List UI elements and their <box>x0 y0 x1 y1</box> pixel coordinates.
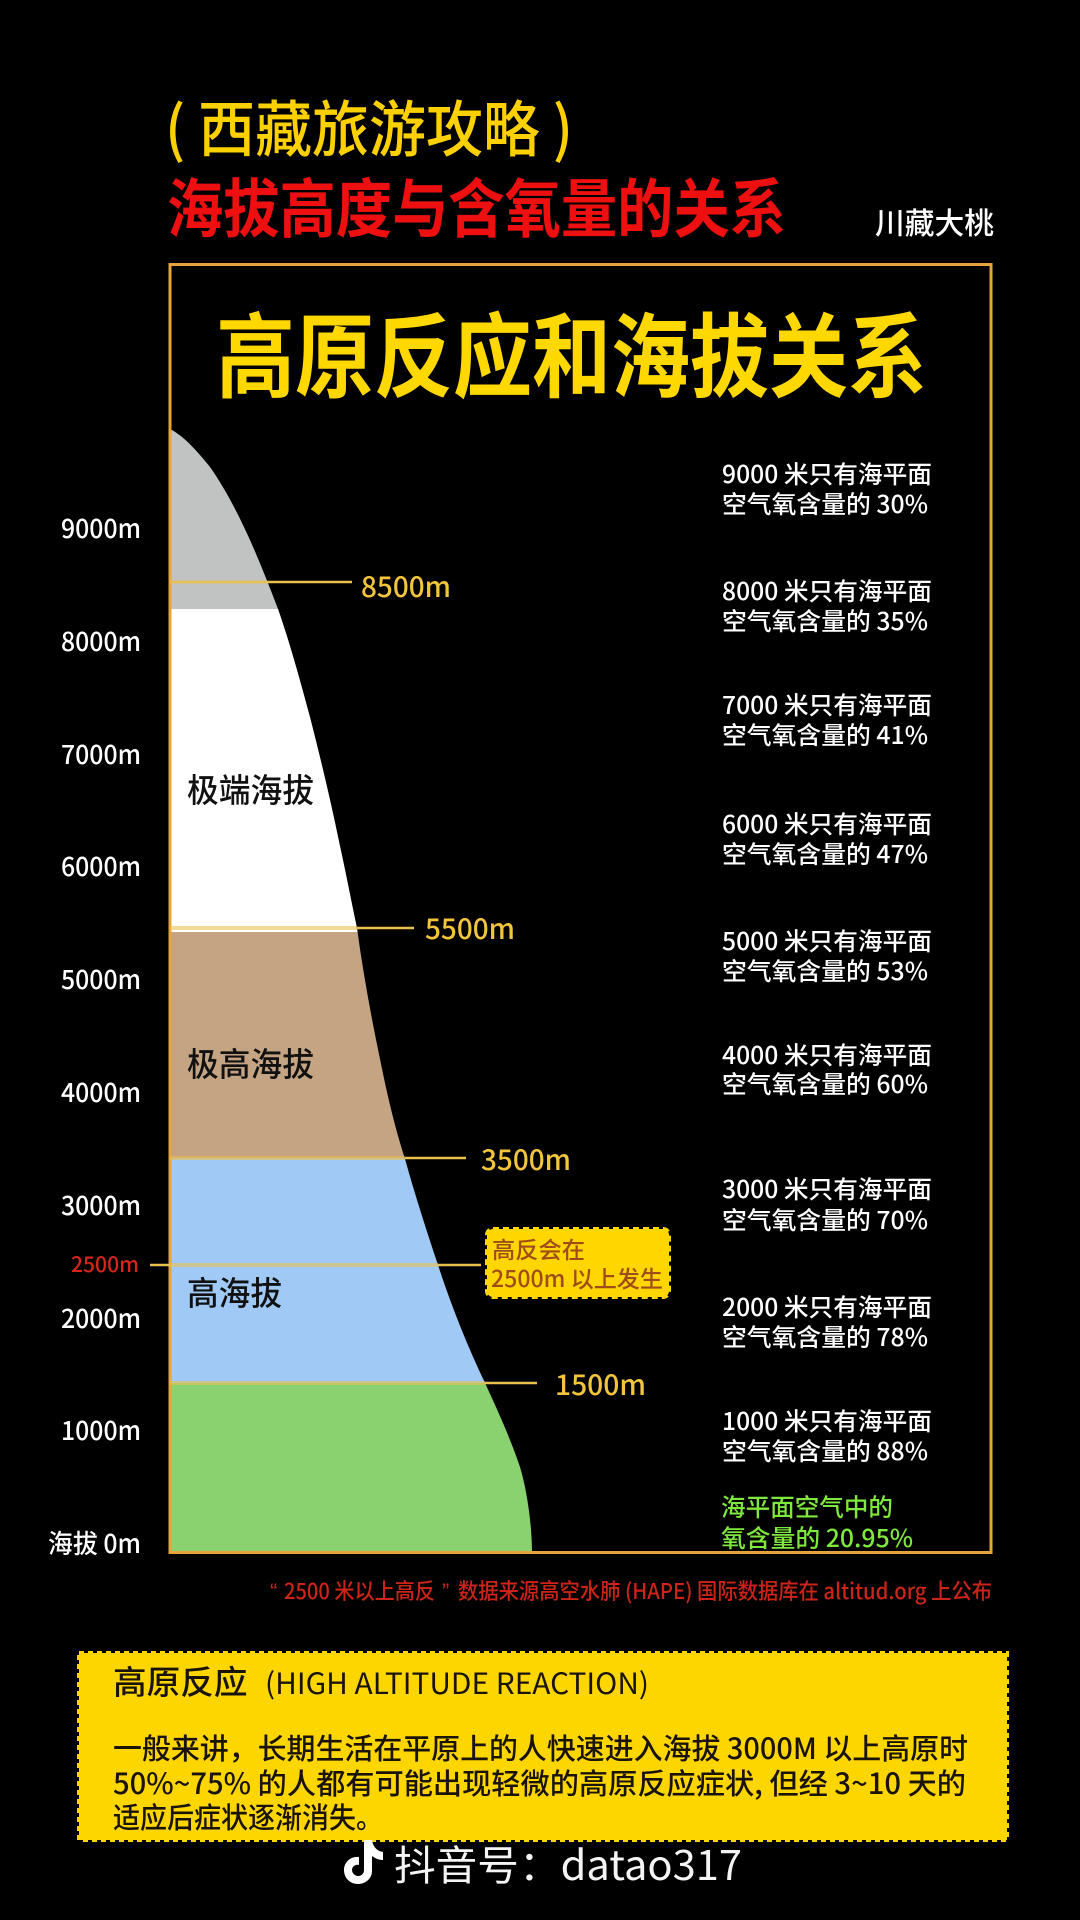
oxygen readings column: 空气氧含量的 41% <box>722 717 928 752</box>
oxygen readings column: 8000 米只有海平面 <box>722 573 932 608</box>
oxygen readings column: 9000 米只有海平面 <box>722 456 932 491</box>
watermark: douyin account <box>344 1832 742 1892</box>
altitude axis labels: 海拔 0m <box>48 1524 141 1561</box>
marker 5500m: 5500m <box>425 908 515 948</box>
zone label: very high altitude: 极高海拔 <box>187 1038 314 1086</box>
author name: 川藏大桃 <box>875 199 994 243</box>
altitude axis labels: 1000m <box>61 1411 141 1448</box>
oxygen readings column: 空气氧含量的 70% <box>722 1202 928 1237</box>
oxygen readings column: 空气氧含量的 47% <box>722 836 928 871</box>
footnote: data source: 数据来源高空水肺 (HAPE) 国际数据库在 altitud.org 上公布 <box>458 1574 992 1606</box>
explanation heading: 高原反应 <box>113 1656 255 1704</box>
oxygen readings column: 空气氧含量的 30% <box>722 486 928 521</box>
panel: altitude reaction explanation <box>79 1653 1007 1840</box>
footnote: data source: 2500 米以上高反 <box>284 1574 435 1606</box>
panel: altitude chart <box>48 264 991 1561</box>
callout: altitude sickness threshold: 2500m 以上发生 <box>491 1260 663 1294</box>
altitude axis labels: 8000m <box>61 622 141 659</box>
title: tibet travel guide: ( 西藏旅游攻略 ) <box>165 80 573 169</box>
oxygen readings column: 空气氧含量的 60% <box>722 1066 928 1101</box>
explanation body text <box>113 1726 968 1837</box>
footnote: data source <box>270 1574 992 1606</box>
altitude axis labels: 2000m <box>61 1299 141 1336</box>
altitude axis labels: 5000m <box>61 960 141 997</box>
icon: douyin note <box>344 1840 383 1884</box>
oxygen readings column: 空气氧含量的 78% <box>722 1319 928 1354</box>
altitude axis labels: 3000m <box>61 1186 141 1223</box>
zone label: high altitude: 高海拔 <box>187 1267 282 1315</box>
explanation body text: 适应后症状逐渐消失。 <box>113 1795 383 1837</box>
altitude axis labels: 9000m <box>61 509 141 546</box>
oxygen readings column: 5000 米只有海平面 <box>722 923 932 958</box>
panel frame <box>170 264 991 1552</box>
oxygen readings column: 空气氧含量的 88% <box>722 1433 928 1468</box>
altitude axis labels: 7000m <box>61 735 141 772</box>
callout: altitude sickness threshold: 高反会在 <box>492 1231 585 1265</box>
oxygen readings column: 1000 米只有海平面 <box>722 1403 932 1438</box>
footnote: data source: “ <box>270 1579 277 1604</box>
oxygen readings column: 7000 米只有海平面 <box>722 687 932 722</box>
altitude axis labels <box>48 509 141 1561</box>
red altitude label 2500m: 2500m <box>71 1249 139 1279</box>
title: altitude and oxygen relation: 海拔高度与含氧量的关系 <box>167 159 786 251</box>
callout: altitude sickness threshold <box>487 1229 669 1297</box>
account text: 抖音号：datao317 <box>394 1832 742 1892</box>
explanation heading: (HIGH ALTITUDE REACTION) <box>265 1661 649 1703</box>
explanation body text: 50%~75% 的人都有可能出现轻微的高原反应症状, 但经 3~10 天的 <box>113 1761 966 1803</box>
oxygen readings column: 4000 米只有海平面 <box>722 1037 932 1072</box>
altitude axis labels: 4000m <box>61 1073 141 1110</box>
panel heading: 高原反应和海拔关系 <box>216 284 927 417</box>
oxygen readings column: 2000 米只有海平面 <box>722 1289 932 1324</box>
marker 2500m <box>150 1264 481 1266</box>
oxygen readings column: 6000 米只有海平面 <box>722 806 932 841</box>
oxygen readings column <box>721 456 932 1555</box>
explanation body text: 一般来讲，长期生活在平原上的人快速进入海拔 3000M 以上高原时 <box>113 1726 968 1768</box>
yellow explanation box <box>79 1653 1007 1840</box>
altitude axis labels: 6000m <box>61 847 141 884</box>
oxygen readings column: 空气氧含量的 53% <box>722 953 928 988</box>
oxygen readings column: 3000 米只有海平面 <box>722 1171 932 1206</box>
oxygen readings column: 空气氧含量的 35% <box>722 603 928 638</box>
marker 1500m: 1500m <box>555 1364 646 1404</box>
footnote: data source: ” <box>442 1579 449 1604</box>
oxygen readings column: 海平面空气中的 <box>721 1489 893 1524</box>
zone label: extreme altitude: 极端海拔 <box>187 764 314 812</box>
marker 8500m: 8500m <box>361 566 451 606</box>
oxygen readings column: 氧含量的 20.95% <box>721 1520 913 1555</box>
marker 3500m: 3500m <box>481 1139 571 1179</box>
mountain altitude zones <box>172 430 532 1551</box>
